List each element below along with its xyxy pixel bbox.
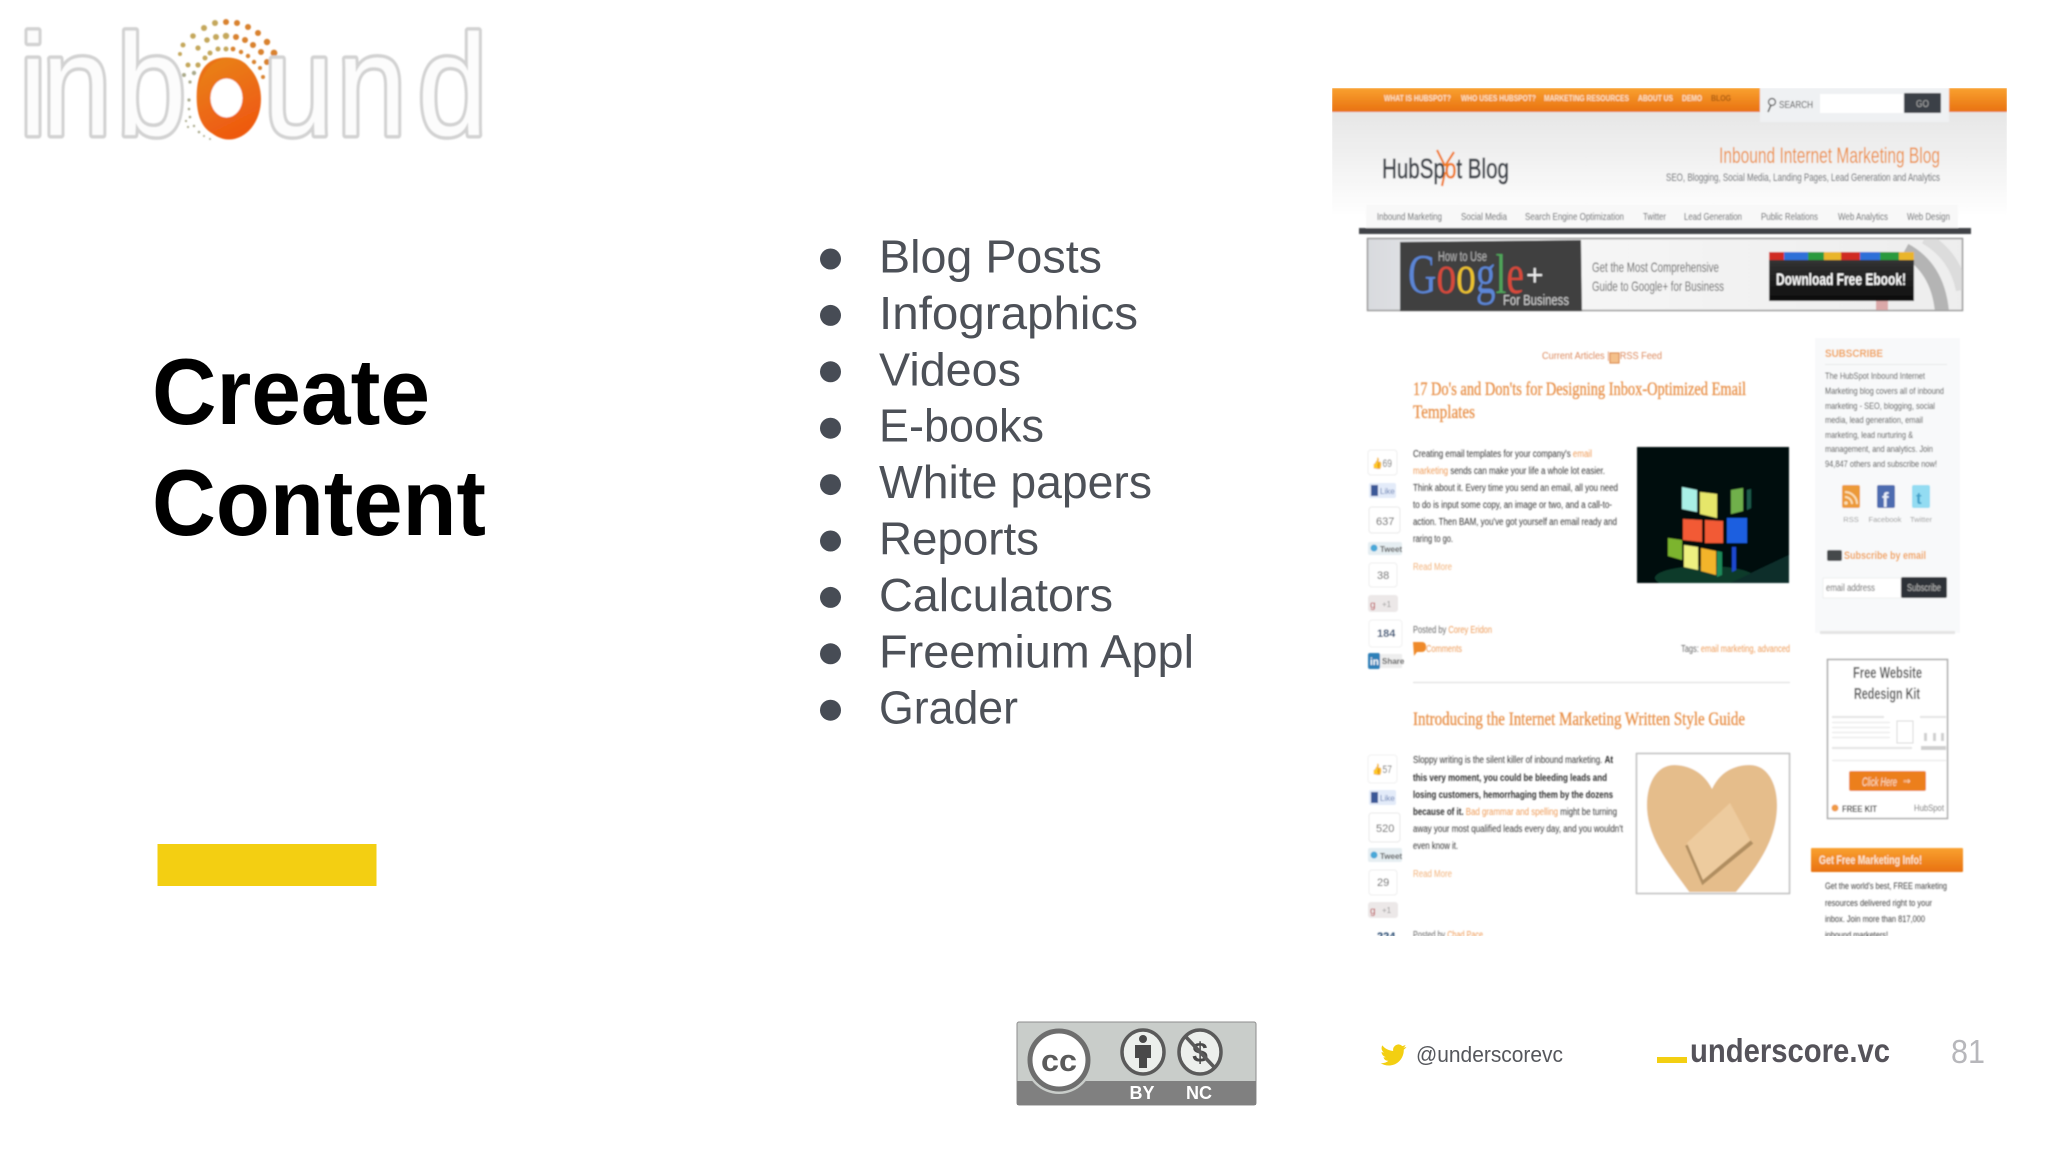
article 1 body: to do is input some copy, an image or two, and a call-to- xyxy=(1413,500,1612,511)
category navigation: Inbound Marketing xyxy=(1377,211,1442,223)
orange top navigation: WHAT IS HUBSPOT? xyxy=(1384,94,1451,103)
wireframe sketch xyxy=(1832,716,1946,761)
social icons: Twitter xyxy=(1910,515,1933,524)
social icons: RSS xyxy=(1843,515,1859,524)
subscribe by email: Subscribe xyxy=(1907,583,1941,594)
article 2 body: Posted by Chad Pace xyxy=(1413,930,1483,941)
sidebar: free website redesign kit xyxy=(1828,660,1948,818)
screenshot header background xyxy=(1332,110,2007,187)
article 1 social counters: Like xyxy=(1380,487,1395,496)
article 2 body xyxy=(1413,755,1623,941)
twitter handle xyxy=(1380,1042,1563,1067)
article 2 social counters: 520 xyxy=(1376,823,1394,835)
handle text: @underscorevc xyxy=(1416,1042,1563,1067)
licence labels xyxy=(1129,1083,1212,1103)
article 1: 17 Do's and Don'ts for Designing Inbox-Optimized Email xyxy=(1413,379,1746,400)
article 2 social counters: 👍57 xyxy=(1372,763,1392,776)
article 2 body: because of it. Bad grammar and spelling might be turning xyxy=(1413,807,1617,818)
article 2 social counters: Like xyxy=(1380,794,1395,803)
bullet list: White papers xyxy=(879,456,1152,508)
icon: twitter bird xyxy=(1380,1044,1406,1065)
article 1 social counters: 👍69 xyxy=(1372,457,1392,470)
sidebar: free website redesign kit: Click Here xyxy=(1862,775,1897,789)
badge: creative commons BY NC xyxy=(1017,1022,1256,1105)
article 1 social counters: Share xyxy=(1382,657,1405,666)
blog tagline xyxy=(1666,143,1940,184)
image: rubik's cube xyxy=(1637,447,1789,590)
subscribe by email: Subscribe by email xyxy=(1844,550,1926,562)
search box: GO xyxy=(1916,99,1929,110)
bullet list: Videos xyxy=(879,343,1021,395)
article 1 body: marketing sends can make your life a whole lot easier. xyxy=(1413,466,1605,477)
article 2 social counters: Tweet xyxy=(1380,852,1402,861)
bullet list: Infographics xyxy=(879,287,1138,339)
banner: Google+ for Business: For Business xyxy=(1503,292,1569,309)
orange top navigation: WHO USES HUBSPOT? xyxy=(1461,94,1536,103)
social icons: f xyxy=(1882,490,1889,512)
logo wordmark: inbound xyxy=(19,5,487,166)
subscribe description: management, and analytics. Join xyxy=(1825,444,1933,455)
social icons: Facebook xyxy=(1869,515,1902,524)
logo: inbound xyxy=(19,5,487,166)
orange top navigation xyxy=(1332,88,2007,112)
article 2 social counters: +1 xyxy=(1382,906,1392,915)
subscribe description: marketing, lead nurturing & xyxy=(1825,430,1914,441)
orange top navigation: ABOUT US xyxy=(1638,94,1674,103)
article 2 body: even know it. xyxy=(1413,841,1458,852)
banner: Google+ for Business: How to Use xyxy=(1438,248,1487,264)
logo orange ring xyxy=(197,58,261,140)
subscribe description: media, lead generation, email xyxy=(1825,415,1923,426)
article 1 body: Creating email templates for your company's email xyxy=(1413,449,1592,460)
panel: HubSpot blog screenshot xyxy=(1332,88,2007,943)
article 1 xyxy=(1413,379,1790,656)
article 1 social counters: +1 xyxy=(1382,600,1392,609)
page number: 81 xyxy=(1951,1033,1985,1070)
article 2 body: away your most qualified leads every day, and you wouldn't xyxy=(1413,824,1623,835)
orange top navigation: MARKETING RESOURCES xyxy=(1544,94,1630,103)
article 2 social counters: 224 xyxy=(1377,931,1396,943)
article 2 social counters xyxy=(1368,755,1402,943)
subscribe description: marketing - SEO, blogging, social xyxy=(1825,401,1935,412)
title xyxy=(152,339,486,555)
article 1 social counters: 184 xyxy=(1377,628,1396,640)
article 1 social counters: in xyxy=(1370,657,1379,668)
sidebar: get free marketing info: Get Free Marketing Info! xyxy=(1819,855,1922,867)
bullet markers xyxy=(820,248,841,721)
article 1 body: Posted by Corey Eridon xyxy=(1413,625,1492,636)
sidebar: get free marketing info: Get the world's best, FREE marketing xyxy=(1825,881,1947,892)
blog tagline: Inbound Internet Marketing Blog xyxy=(1719,143,1940,168)
title: Content xyxy=(152,450,486,555)
HubSpot Blog logo: HubSpot Blog xyxy=(1382,153,1509,184)
social icons xyxy=(1842,485,1933,524)
article 1 meta: Tags: email marketing, advanced xyxy=(1681,644,1790,655)
download button: Download Free Ebook! xyxy=(1776,270,1906,289)
bullet list: Grader xyxy=(879,682,1018,734)
social icons: t xyxy=(1916,489,1922,508)
category navigation: Web Design xyxy=(1907,211,1950,223)
article 1 body: Read More xyxy=(1413,562,1452,573)
article 1 social counters: g xyxy=(1370,600,1376,611)
banner: Google+ for Business: Google xyxy=(1408,244,1524,306)
sidebar: free website redesign kit: ⇒ xyxy=(1903,776,1911,786)
sidebar: free website redesign kit: Free Website xyxy=(1853,665,1922,682)
image: bandage heart xyxy=(1636,754,1790,894)
subscribe description xyxy=(1825,371,1944,470)
brand: underscore.vc: underscore.vc xyxy=(1690,1032,1890,1069)
subscribe by email: email address xyxy=(1826,583,1875,594)
bullet list xyxy=(820,230,1194,734)
article 1: Templates xyxy=(1413,402,1475,423)
article 2 social counters: g xyxy=(1370,906,1376,917)
sidebar: get free marketing info: inbox. Join more than 817,000 xyxy=(1825,914,1925,925)
sidebar: get free marketing info: inbound marketers! xyxy=(1825,930,1888,941)
article 2 body: Sloppy writing is the silent killer of inbound marketing. At xyxy=(1413,755,1614,766)
divider xyxy=(1413,682,1790,683)
article 1 body: action. Then BAM, you've got yourself an email ready and xyxy=(1413,517,1617,528)
article 2 body: Read More xyxy=(1413,869,1452,880)
sidebar: subscribe: SUBSCRIBE xyxy=(1825,348,1883,360)
category navigation: Public Relations xyxy=(1761,211,1818,223)
current articles link: Current Articles | RSS Feed xyxy=(1542,351,1662,362)
logo dots xyxy=(174,19,277,140)
article 1 body: Think about it. Every time you send an email, all you need xyxy=(1413,483,1618,494)
download button xyxy=(1769,252,1914,301)
article 2 xyxy=(1413,709,1745,941)
article 1 social counters: 38 xyxy=(1377,570,1389,582)
subscribe by email xyxy=(1823,550,1947,598)
article 1 body xyxy=(1413,449,1618,636)
category navigation: Twitter xyxy=(1643,211,1666,223)
cc circle: cc xyxy=(1041,1043,1077,1078)
search box xyxy=(1760,88,1949,122)
non-commercial icon xyxy=(1179,1030,1221,1074)
sidebar: subscribe xyxy=(1815,338,1960,634)
category navigation: Web Analytics xyxy=(1838,211,1888,223)
search box: SEARCH xyxy=(1779,100,1813,111)
subscribe description: Marketing blog covers all of inbound xyxy=(1825,386,1944,397)
category navigation: Lead Generation xyxy=(1684,211,1742,223)
category navigation: Social Media xyxy=(1461,211,1507,223)
cc circle xyxy=(1025,1026,1093,1094)
bullet list: Blog Posts xyxy=(879,230,1102,282)
sidebar: free website redesign kit: HubSpot xyxy=(1914,803,1944,814)
article 2 social counters: 29 xyxy=(1377,877,1389,889)
bullet list: Reports xyxy=(879,512,1039,564)
article 1 meta: Comments xyxy=(1426,644,1462,655)
category navigation xyxy=(1358,212,1972,235)
article 1 social counters: Tweet xyxy=(1380,545,1402,554)
non-commercial icon: $ xyxy=(1192,1037,1208,1068)
orange top navigation: DEMO xyxy=(1682,94,1702,103)
article 1 meta xyxy=(1413,642,1790,656)
subscribe description: 94,847 others and subscribe now! xyxy=(1825,459,1937,470)
bullet list: Calculators xyxy=(879,569,1113,621)
bullet list: Freemium Appl xyxy=(879,625,1194,677)
banner: Google+ for Business: Guide to Google+ for Business xyxy=(1592,278,1724,294)
title: Create xyxy=(152,339,430,444)
sidebar: get free marketing info xyxy=(1811,848,1963,941)
category navigation: Search Engine Optimization xyxy=(1525,211,1624,223)
banner: Google+ for Business: Get the Most Comprehensive xyxy=(1592,259,1719,275)
bullet list: E-books xyxy=(879,400,1044,452)
article 1 social counters xyxy=(1368,450,1405,669)
attribution icon xyxy=(1122,1030,1164,1074)
banner: Google+ for Business: + xyxy=(1526,259,1544,292)
subscribe description: The HubSpot Inbound Internet xyxy=(1825,371,1925,382)
blog tagline: SEO, Blogging, Social Media, Landing Pages, Lead Generation and Analytics xyxy=(1666,172,1940,184)
licence labels: NC xyxy=(1186,1083,1212,1103)
article 1 social counters: 637 xyxy=(1376,516,1394,528)
sidebar: get free marketing info: resources delivered right to your xyxy=(1825,898,1932,909)
accent bar xyxy=(158,844,376,886)
article 1 body: raring to go. xyxy=(1413,534,1453,545)
article 2: Introducing the Internet Marketing Written Style Guide xyxy=(1413,709,1745,730)
article 2 body: this very moment, you could be bleeding leads and xyxy=(1413,773,1607,784)
article 2 body: losing customers, hemorrhaging them by the dozens xyxy=(1413,790,1613,801)
orange top navigation: BLOG xyxy=(1711,94,1731,103)
sidebar: free website redesign kit: FREE KIT xyxy=(1842,804,1877,815)
banner: Google+ for Business xyxy=(1368,238,1962,312)
licence labels: BY xyxy=(1129,1083,1155,1103)
sidebar: free website redesign kit: Redesign Kit xyxy=(1854,686,1920,703)
